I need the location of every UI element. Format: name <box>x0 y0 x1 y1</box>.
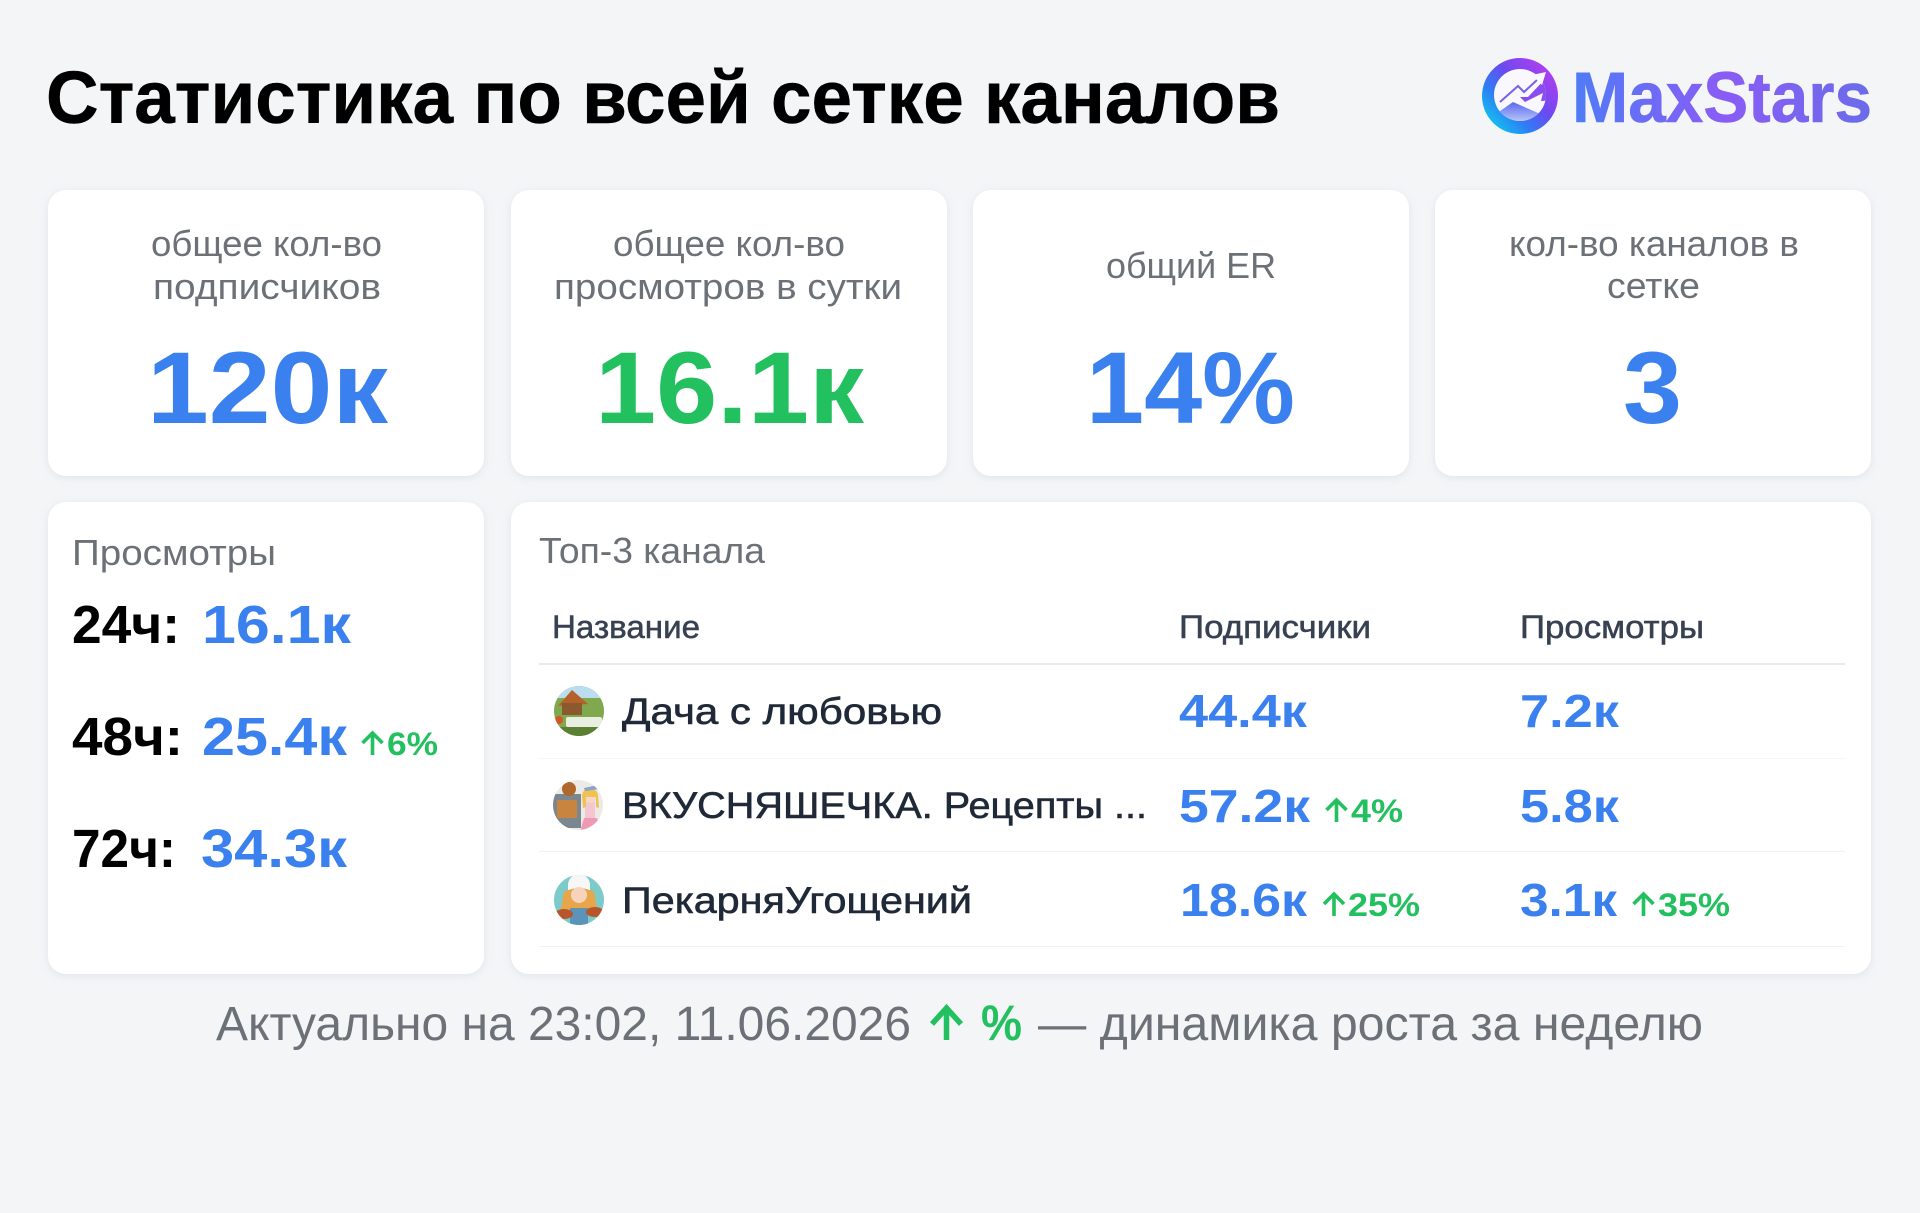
panel: subscribers total: 120к <box>147 331 389 445</box>
panel: subscribers total <box>48 190 484 476</box>
panel: daily views total: 16.1к <box>595 331 865 445</box>
row: ВКУСНЯШЕЧКА <box>553 780 1620 832</box>
arrow: up <box>1324 894 1344 916</box>
title: Статистика по всей сетке каналов <box>46 56 1280 139</box>
panel: subscribers total: общее кол-во <box>151 223 382 264</box>
icon: logo emblem <box>1482 58 1558 134</box>
table header: Название <box>552 609 700 645</box>
panel: views <box>48 502 484 974</box>
panel: daily views total <box>511 190 947 476</box>
views 24h <box>72 595 352 655</box>
growth: 35% <box>1658 887 1730 923</box>
panel: channel count: 3 <box>1623 331 1682 445</box>
heading: top-3: Топ-3 канала <box>539 530 766 571</box>
footer note: % <box>981 995 1022 1051</box>
panel: channel count <box>1435 190 1871 476</box>
logo: MaxStars <box>1482 58 1872 138</box>
growth: 25% <box>1348 887 1420 923</box>
panel: daily views total: просмотров в сутки <box>554 266 902 307</box>
views 72h: 34.3к <box>201 819 348 879</box>
table header: Просмотры <box>1520 609 1704 645</box>
panel: daily views total: общее кол-во <box>613 223 845 264</box>
views 72h: 72ч: <box>72 819 176 879</box>
views: 3.1к <box>1520 874 1618 926</box>
subscribers: 18.6к <box>1180 874 1308 926</box>
channel name: Дача с любовью <box>622 691 942 732</box>
arrow: up <box>362 733 382 755</box>
footer note: Актуально на 23:02, 11.06.2026 <box>216 998 911 1051</box>
subscribers: 44.4к <box>1179 685 1308 737</box>
panel: channel count: сетке <box>1607 265 1700 306</box>
panel: total ER <box>973 190 1409 476</box>
footer note <box>216 995 1703 1051</box>
channel name: ПекарняУгощений <box>622 880 972 921</box>
views 24h: 24ч: <box>72 595 180 655</box>
icon: avatar 3 <box>554 874 604 926</box>
views 48h: 48ч: <box>72 707 183 767</box>
views 24h: 16.1к <box>202 595 352 655</box>
views 72h <box>72 819 348 879</box>
panel: total ER: 14% <box>1086 331 1295 445</box>
arrow: up <box>1634 894 1654 916</box>
icon: avatar 1 <box>554 686 604 736</box>
views: 7.2к <box>1520 685 1620 737</box>
icon: avatar 2 <box>553 780 603 832</box>
panel: subscribers total: подписчиков <box>153 266 381 307</box>
logo wordmark: MaxStars <box>1572 59 1872 138</box>
table header <box>552 609 1704 645</box>
subscribers: 57.2к <box>1179 780 1311 832</box>
views 48h: 25.4к <box>202 707 348 767</box>
footer note: — динамика роста за неделю <box>1038 998 1703 1051</box>
growth: 6% <box>387 726 438 762</box>
row: Дача с любовью <box>554 685 1620 737</box>
panel: top-3 channels <box>511 502 1871 974</box>
panel: channel count: кол-во каналов в <box>1509 223 1799 264</box>
views: 5.8к <box>1520 780 1620 832</box>
panel: total ER: общий ER <box>1106 245 1276 286</box>
arrow: up <box>932 1008 961 1040</box>
table header: Подписчики <box>1179 609 1371 645</box>
row: ПекарняУгощений <box>554 874 1730 926</box>
arrow: up <box>1326 800 1346 822</box>
heading: views: Просмотры <box>72 532 276 573</box>
growth: 4% <box>1351 793 1403 829</box>
channel name: ВКУСНЯШЕЧКА. Рецепты ... <box>622 785 1147 826</box>
views 48h <box>72 707 438 767</box>
